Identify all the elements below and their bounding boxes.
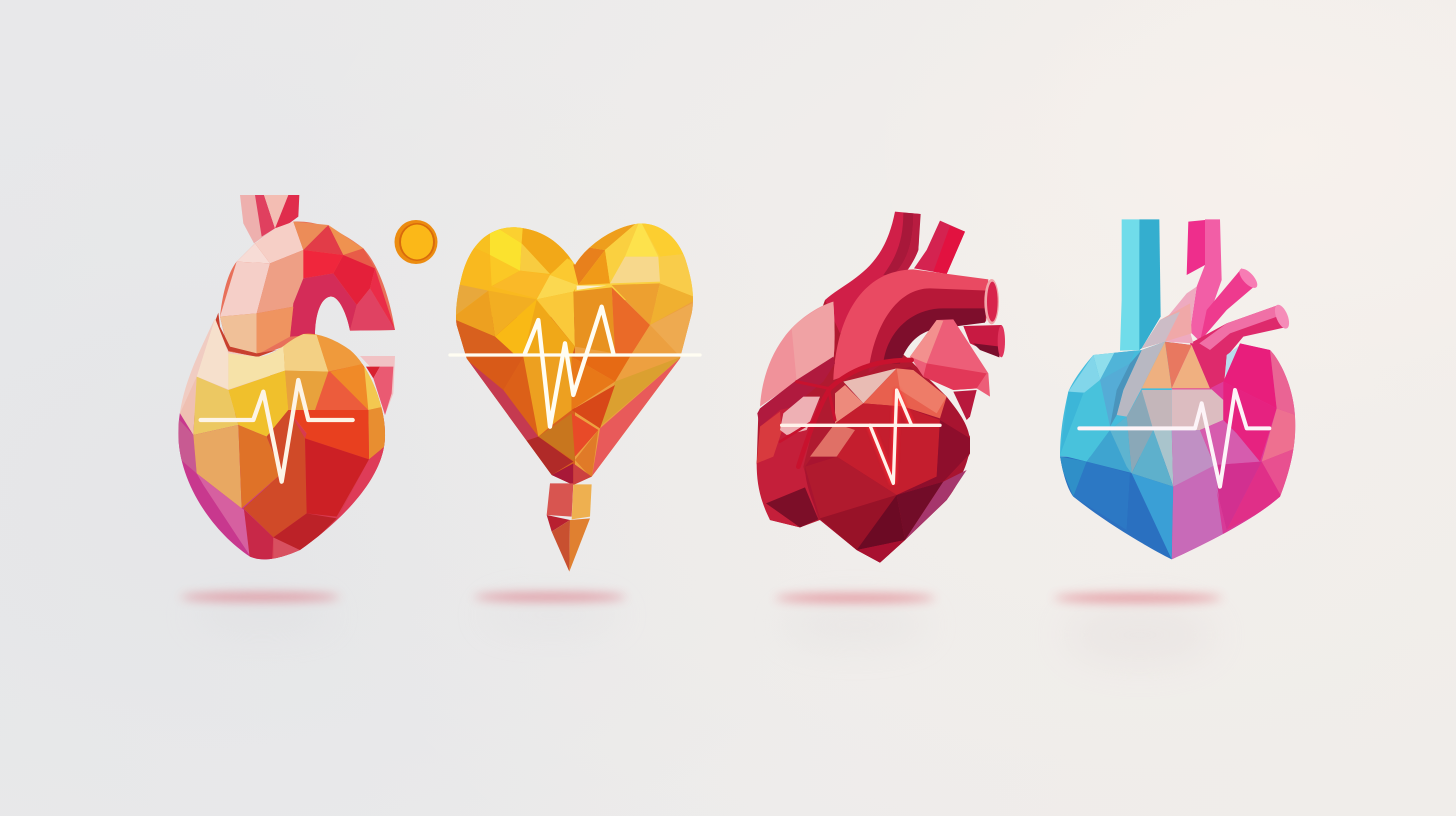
heart 2: yellow xyxy=(448,217,702,572)
base silhouette xyxy=(757,300,970,563)
glow xyxy=(870,390,912,483)
top vessels xyxy=(240,195,299,243)
heart 1: orange and pink xyxy=(170,195,395,567)
heart body xyxy=(1060,342,1296,560)
upper chamber xyxy=(214,222,395,357)
small left ventricle xyxy=(757,397,820,527)
pink auricle cone xyxy=(910,319,990,420)
pulse line xyxy=(1079,390,1269,487)
main ventricle xyxy=(178,318,386,560)
coronary artery xyxy=(780,360,912,467)
pink tubes xyxy=(1142,219,1292,392)
glow line xyxy=(448,344,702,366)
illustration: four hearts xyxy=(178,195,1296,610)
heart 3: anatomical red xyxy=(757,212,1005,563)
left atrium xyxy=(757,302,835,428)
heart 4: blue and pink xyxy=(1053,219,1302,567)
top vessels xyxy=(825,212,965,333)
heart body xyxy=(450,217,702,490)
floor shadows xyxy=(180,593,1222,665)
second vessel xyxy=(963,325,1005,357)
aorta arch xyxy=(833,269,999,380)
pulse line xyxy=(782,390,940,483)
blue tube xyxy=(1120,219,1161,351)
main ventricle xyxy=(805,367,970,563)
pointed tail xyxy=(547,483,592,572)
pulse line xyxy=(201,380,353,482)
icon: gold coin xyxy=(394,220,438,264)
right rear chamber xyxy=(360,356,395,415)
pulse line xyxy=(450,307,700,427)
